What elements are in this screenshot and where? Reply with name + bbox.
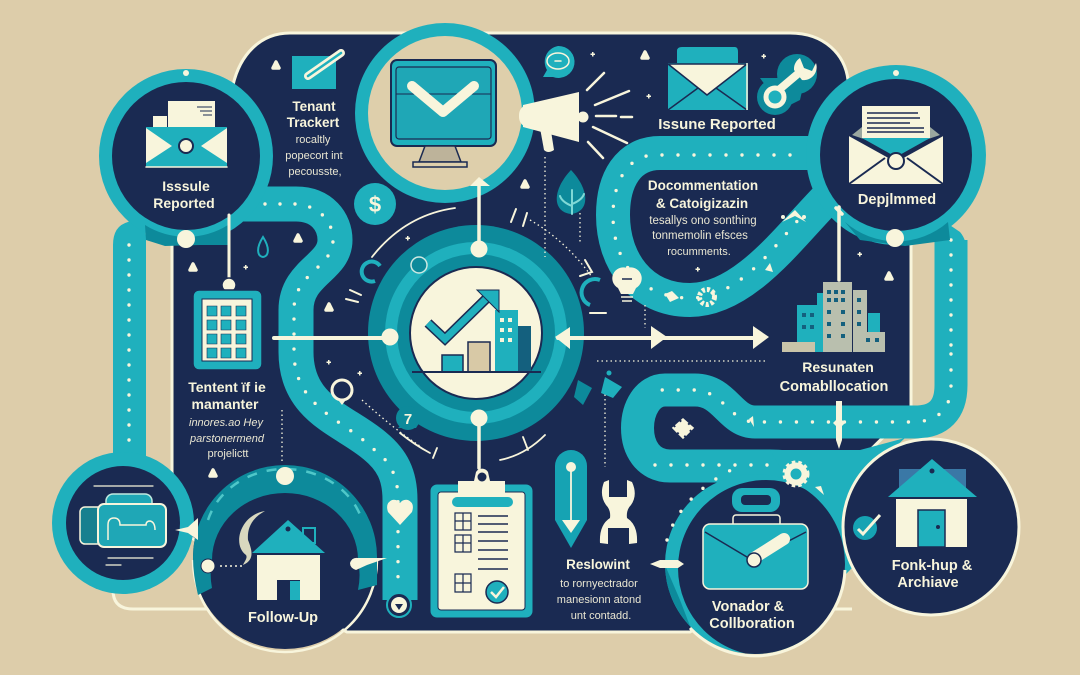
text: tenant tracker: rocaltly (296, 134, 331, 146)
text: resunaten comabllocation: Resunaten (802, 359, 874, 375)
text: tenant tracker: popecort int (285, 150, 343, 162)
text: resolving: unt contadd. (571, 610, 631, 622)
text: tenant tracker (285, 99, 343, 178)
icon: road marks on documentation loop (665, 210, 806, 304)
clipboard (430, 469, 533, 618)
icon: diamond badge (674, 420, 692, 437)
text: resunaten comabllocation: Comabllocation (780, 379, 888, 395)
central target rings (368, 225, 584, 441)
circle: deplimmed: Depjlmmed (858, 192, 936, 208)
circle: issue reported: Isssule (162, 178, 210, 194)
icon: water drop (258, 237, 268, 257)
arrow: road to follow-up (350, 558, 387, 570)
arrow: resolving to vendor (650, 560, 684, 568)
navy main panel (113, 33, 911, 632)
circle: follow-up and archive: Archiave (897, 575, 959, 591)
circle: monitor (355, 23, 535, 203)
text: documentation and categorization: tesallys ono sonthing (649, 215, 757, 227)
circle: vendor collaboration (665, 467, 854, 656)
text: resolving: Reslowint (566, 557, 630, 572)
central icon: check, arrow and buildings (412, 290, 541, 372)
icon: top envelope (668, 47, 748, 110)
text: issue reported: Issune Reported (658, 116, 776, 133)
icon: heart (387, 500, 413, 525)
icon: dollar (354, 183, 396, 225)
road: right vertical path (935, 215, 967, 350)
icon: megaphone with rays (519, 73, 632, 158)
icon: teal leaf drop (557, 170, 585, 214)
icon: dollar: $ (369, 192, 381, 217)
icon: road marker diamonds (749, 416, 824, 495)
badge: number 7 (396, 405, 426, 430)
icon: plus bulb (332, 380, 352, 405)
circle: follow-up (193, 465, 377, 652)
circle: deplimmed (806, 65, 986, 247)
road: left upper winding path (240, 204, 400, 600)
circle: issue reported (99, 69, 273, 248)
text: tenant maintenance (188, 379, 266, 460)
text: tenant tracker: Tenant (292, 99, 336, 114)
arrow: follow-up to archive (175, 518, 198, 540)
text: documentation and categorization: Docommentation (648, 178, 758, 193)
text: tenant maintenance: innores.ao Hey (189, 417, 264, 429)
arrow: down through road (833, 401, 845, 449)
text: tenant tracker: pecousste, (288, 166, 342, 178)
arrow: center down to clipboard (470, 410, 488, 468)
circle: issue reported: Reported (153, 195, 215, 211)
tablet icon (193, 215, 262, 370)
text: documentation and categorization: rocumments. (667, 246, 731, 258)
circle: vendor collaboration: Collboration (709, 616, 795, 632)
road: documentation loop (613, 153, 830, 300)
text: documentation and categorization (648, 178, 758, 258)
icon: gear (784, 462, 808, 486)
text: tenant maintenance: mamanter (192, 396, 259, 412)
icon: light bulb (612, 267, 642, 301)
icon: road pin with arrow (555, 450, 587, 548)
road: left vertical path (113, 216, 146, 470)
text: resunaten comabllocation (780, 359, 888, 395)
text: tenant maintenance: parstonermend (189, 433, 265, 445)
text: tenant maintenance: projelictt (208, 448, 248, 460)
icon: wrench (757, 54, 817, 115)
icon: road end badge (387, 593, 411, 617)
icon: chat bubble (543, 46, 575, 78)
circle: follow-up and archive: Fonk-hup & (892, 558, 973, 574)
arrow: center left to tablet (274, 328, 398, 346)
arrow: center up to monitor (470, 177, 490, 258)
double arrow: center to right (555, 326, 769, 349)
text: documentation and categorization: & Catoigizazin (656, 196, 748, 211)
icon: pen card (292, 53, 341, 89)
text: tenant maintenance: Tentent ïf ie (188, 379, 266, 395)
text: resolving: to rornyectrador (560, 578, 638, 590)
circle: follow-up and archive (843, 439, 1019, 615)
badge: number 7: 7 (404, 411, 412, 428)
text: documentation and categorization: tonmemolin efsces (652, 230, 748, 242)
decorative arcs and ticks (282, 157, 765, 467)
decorative stars (190, 52, 892, 504)
text: resolving: manesionn atond (557, 594, 641, 606)
circle: follow-up: Follow-Up (248, 610, 318, 626)
icon: cream wrench (600, 480, 637, 544)
icon: city buildings (782, 207, 885, 352)
road: lower right winding path (638, 240, 951, 575)
text: tenant tracker: Trackert (287, 115, 340, 130)
circle: vendor collaboration: Vonador & (712, 599, 785, 615)
circle: archive folder small (52, 452, 194, 594)
icon: small shapes beside center (574, 370, 622, 405)
text: resolving (557, 557, 641, 622)
